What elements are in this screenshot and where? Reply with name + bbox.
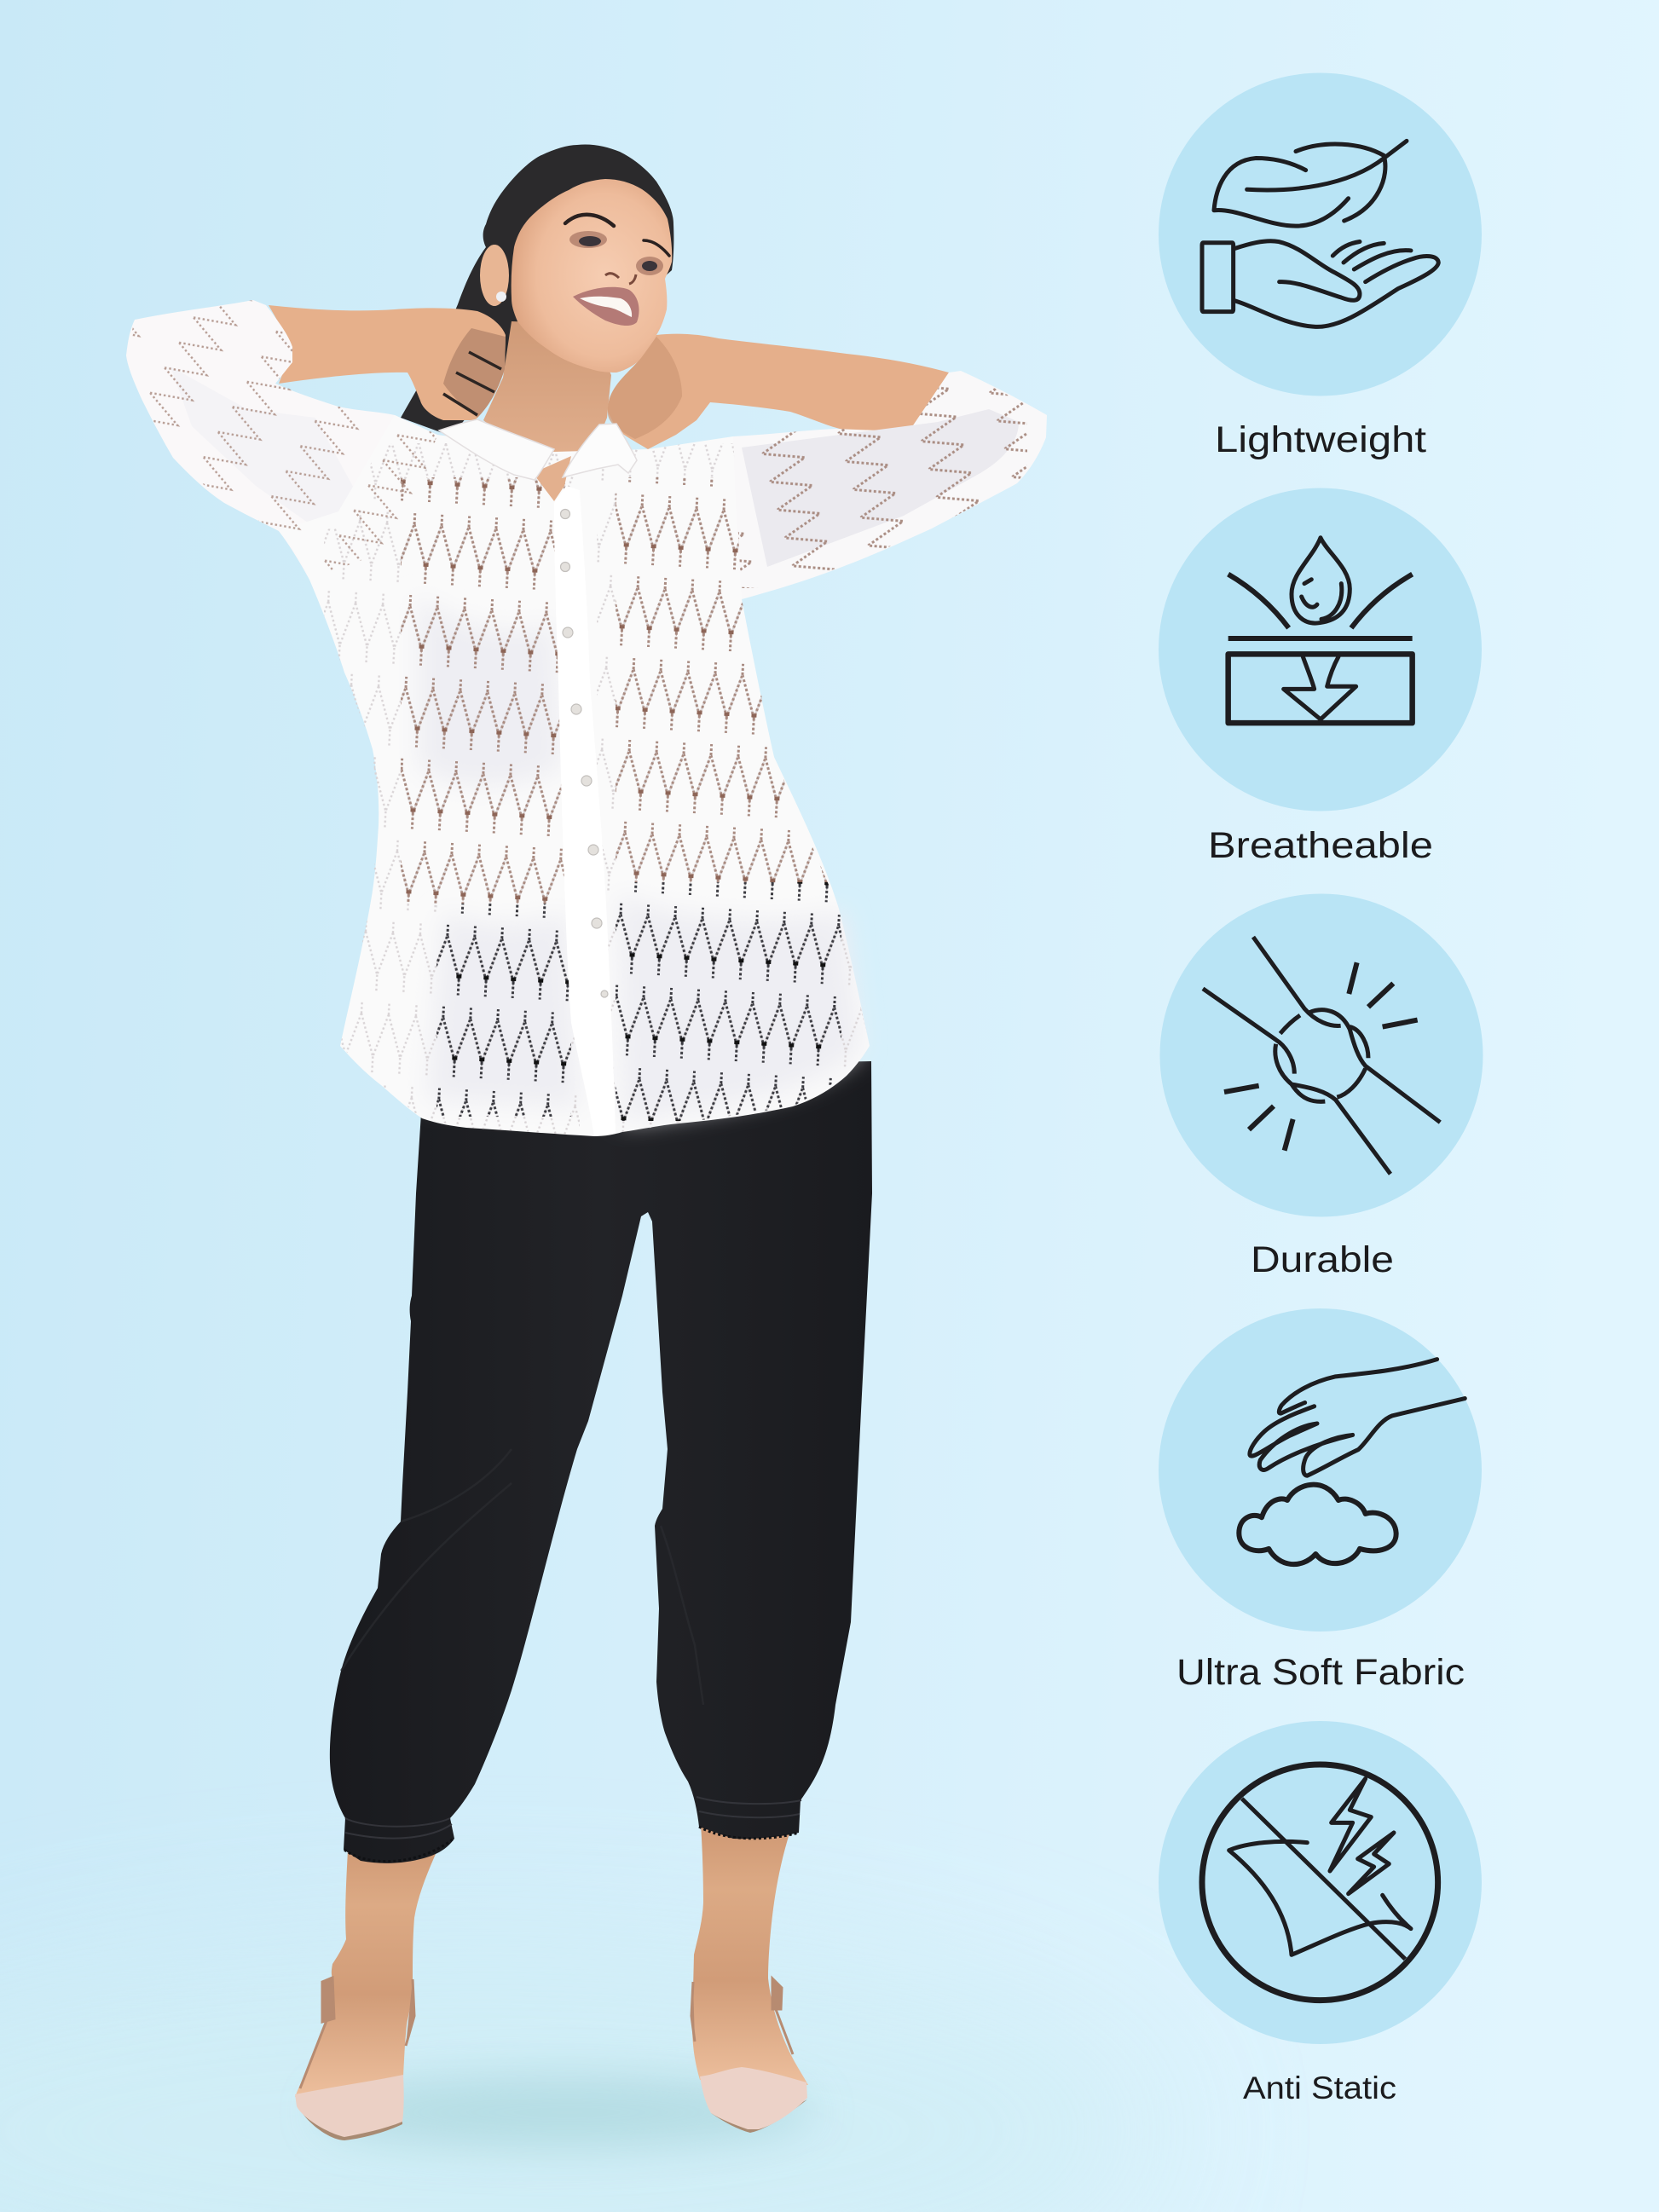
icon: hand touching cloud [1239,1360,1465,1564]
eyelet dark pattern [436,882,841,1121]
eyelet left sleeve pattern [132,300,436,570]
collar right [563,424,637,477]
right sleeve [716,371,1047,599]
right sleeve sheer panel [742,409,1019,567]
palm shade [608,337,682,439]
shirt sheer shade [418,597,861,1121]
shirt body [279,415,870,1136]
buttons [561,510,608,997]
pants sheen folds [341,1449,703,1705]
smile [573,287,639,326]
label: Anti Static [1243,2071,1396,2105]
left shoe strap [300,1978,414,2088]
left leg [295,1841,436,2097]
right cuff gathers [697,1797,801,1817]
circle [1159,488,1482,811]
eyelet right sleeve pattern [737,367,1027,588]
fingers [443,328,506,418]
eyelet faint pattern [324,443,887,1142]
left sleeve sheer panel [171,367,367,537]
left forearm and hand [269,305,506,420]
icon: knotted strands [1203,937,1440,1174]
right leg [692,1824,808,2085]
collar left [439,419,554,480]
photo: woman in white eyelet shirt and black jogger pants [126,144,1047,2148]
placket [554,486,616,1136]
white shirt [126,298,1047,1142]
floor shadow [320,2076,814,2148]
eye left [569,231,607,248]
circle [1159,893,1483,1217]
neck and chest [483,321,611,499]
icon: feather over open hand [1202,141,1438,326]
black pants [330,1061,872,1863]
right shoe strap [691,1978,793,2054]
open neckline skin [533,456,571,501]
right shoe [700,2067,807,2133]
circle [1159,1308,1482,1632]
earring [496,292,506,302]
circle [1159,1721,1482,2044]
eyebrow left [565,215,614,226]
lace trim [344,1827,799,1862]
finger gaps [443,352,501,415]
left shoe [295,2075,404,2140]
feature: Durable [1159,893,1483,1280]
feature: Lightweight [1159,73,1482,460]
label: Durable [1251,1239,1394,1280]
label: Breatheable [1208,825,1433,866]
icon: water drop over membrane [1228,538,1413,723]
icon: crossed out static cloth [1202,1764,1438,2001]
face [512,179,672,373]
label: Lightweight [1215,419,1426,460]
eye right [636,257,663,275]
circle [1159,73,1482,396]
eyebrow right [644,240,669,256]
feature: Ultra Soft Fabric [1159,1308,1482,1693]
left cuff gathers [345,1818,452,1839]
eyelet brown pattern [401,477,850,904]
nose [605,274,636,284]
hair [401,144,673,436]
label: Ultra Soft Fabric [1176,1652,1465,1693]
feature: Anti Static [1159,1721,1482,2105]
right arm and hand [608,334,949,449]
feature: Breatheable [1159,488,1482,866]
ear [480,245,509,306]
left sleeve [126,300,443,597]
